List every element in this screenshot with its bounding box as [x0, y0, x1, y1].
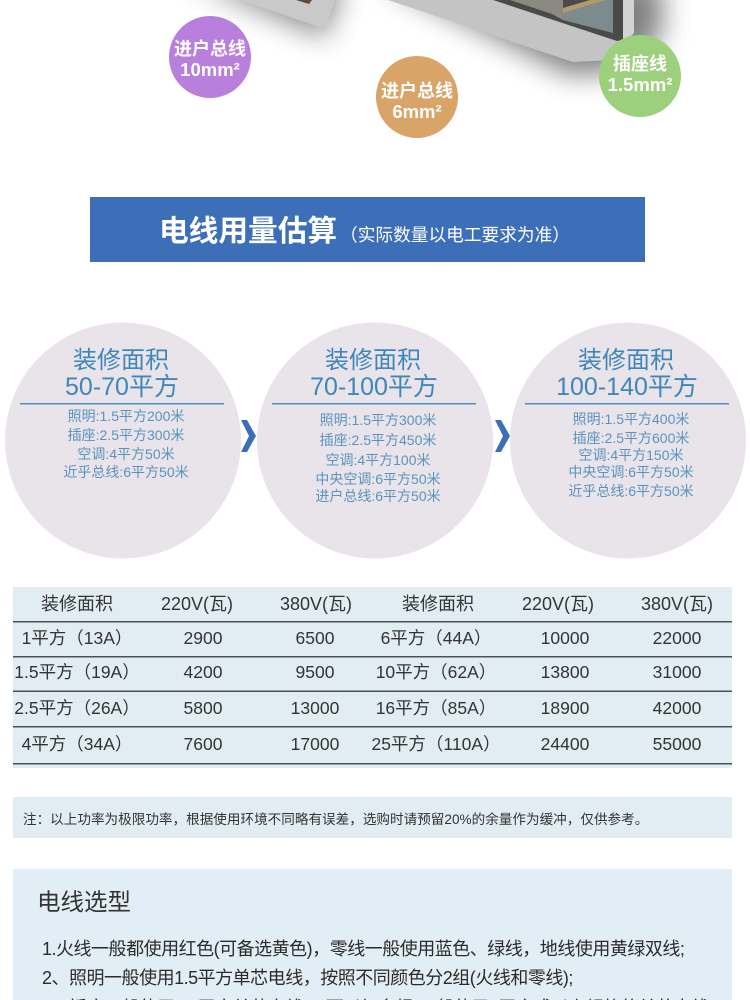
table row 3: 13000 — [291, 698, 340, 718]
note bar — [13, 797, 732, 838]
circle: 70-100 sqm: 进户总线:6平方50米 — [315, 488, 441, 504]
panel heading: 电线选型 — [37, 889, 131, 915]
selection notes — [42, 939, 709, 1000]
circle: 70-100 sqm — [257, 322, 493, 558]
circle: 70-100 sqm: 中央空调:6平方50米 — [315, 471, 441, 487]
arrow: chevron 2 — [495, 420, 510, 452]
table row 3: 18900 — [541, 698, 590, 718]
selection notes: 2、照明一般使用1.5平方单芯电线，按照不同颜色分2组(火线和零线); — [42, 968, 573, 988]
table row 1 — [22, 628, 702, 648]
circle: 50-70 sqm: 空调:4平方50米 — [77, 446, 175, 462]
circle: 100-140 sqm: 100-140平方 — [556, 373, 698, 401]
photo: electrical boxes with shadow — [190, 0, 662, 76]
circle: 50-70 sqm: 照明:1.5平方200米 — [68, 408, 184, 424]
circle: 100-140 sqm: 装修面积 — [578, 347, 674, 374]
table row 2: 4200 — [184, 662, 223, 682]
table: wire power ratings — [13, 587, 732, 768]
table row 3: 5800 — [184, 698, 223, 718]
table row 2 — [14, 662, 702, 682]
table row 1: 22000 — [653, 628, 702, 648]
table row 2: 1.5平方（19A） — [14, 662, 140, 682]
table row 2: 10平方（62A） — [376, 662, 496, 682]
panel: wire selection — [13, 869, 732, 1000]
badge: socket line 1.5mm² — [599, 35, 681, 117]
table row 1: 6500 — [296, 628, 335, 648]
table header row: 380V(瓦) — [641, 594, 713, 614]
table row 1: 2900 — [184, 628, 223, 648]
circle: 70-100 sqm: 插座:2.5平方450米 — [320, 432, 436, 448]
table row 1: 6平方（44A） — [381, 628, 491, 648]
circle: 100-140 sqm: 空调:4平方150米 — [578, 447, 684, 463]
circle: 70-100 sqm: 空调:4平方100米 — [325, 452, 431, 468]
circle: 100-140 sqm: 插座:2.5平方600米 — [573, 430, 689, 446]
badge: incoming line 10mm²: 10mm² — [180, 59, 240, 80]
circle: 100-140 sqm: 中央空调:6平方50米 — [568, 464, 694, 480]
badge: socket line 1.5mm²: 1.5mm² — [608, 74, 672, 95]
table row 4: 25平方（110A） — [371, 734, 501, 754]
table row 2: 9500 — [296, 662, 335, 682]
table row 3: 2.5平方（26A） — [14, 698, 140, 718]
badge: incoming line 10mm²: 进户总线 — [174, 38, 246, 59]
circle: 100-140 sqm: 照明:1.5平方400米 — [573, 411, 689, 427]
badge: incoming line 6mm² — [376, 56, 458, 138]
table row 4: 55000 — [653, 734, 702, 754]
badge: incoming line 10mm² — [169, 16, 251, 98]
table header row: 装修面积 — [41, 594, 113, 614]
table row 1: 1平方（13A） — [22, 628, 132, 648]
table row 3: 42000 — [653, 698, 702, 718]
badge: incoming line 6mm²: 6mm² — [392, 101, 442, 122]
table row 4: 17000 — [291, 734, 340, 754]
table header row: 220V(瓦) — [161, 594, 233, 614]
table header row — [41, 594, 713, 614]
table header row: 220V(瓦) — [522, 594, 594, 614]
table row 4: 24400 — [541, 734, 590, 754]
circle: 70-100 sqm: 照明:1.5平方300米 — [320, 412, 436, 428]
table row 4: 4平方（34A） — [22, 734, 132, 754]
circle: 50-70 sqm: 50-70平方 — [65, 373, 179, 401]
selection notes: 1.火线一般都使用红色(可备选黄色)，零线一般使用蓝色、绿线，地线使用黄绿双线; — [42, 939, 684, 959]
table row 4 — [22, 734, 702, 754]
circle: 50-70 sqm: 插座:2.5平方300米 — [68, 427, 184, 443]
table row 4: 7600 — [184, 734, 223, 754]
heading banner: （实际数量以电工要求为准） — [340, 225, 570, 245]
note bar: 注：以上功率为极限功率，根据使用环境不同略有误差，选购时请预留20%的余量作为缓冲，仅供参考。 — [23, 811, 648, 827]
table row 1: 10000 — [541, 628, 590, 648]
table row 2: 31000 — [653, 662, 702, 682]
circle: 50-70 sqm: 装修面积 — [73, 347, 169, 374]
heading banner: 电线用量估算 — [159, 215, 337, 248]
badge: incoming line 6mm²: 进户总线 — [381, 80, 453, 101]
circle: 100-140 sqm: 近乎总线:6平方50米 — [568, 483, 694, 499]
badge: socket line 1.5mm²: 插座线 — [613, 53, 667, 74]
circle: 100-140 sqm — [510, 322, 746, 558]
table header row: 380V(瓦) — [280, 594, 352, 614]
circle: 50-70 sqm — [5, 322, 241, 558]
circle: 50-70 sqm: 近乎总线:6平方50米 — [63, 464, 189, 480]
arrow: chevron 1 — [241, 420, 256, 452]
circle: 70-100 sqm: 70-100平方 — [310, 373, 438, 401]
heading banner — [90, 197, 645, 262]
table row 3 — [14, 698, 702, 718]
table row 3: 16平方（85A） — [376, 698, 496, 718]
circle: 70-100 sqm: 装修面积 — [325, 347, 421, 374]
table row 2: 13800 — [541, 662, 590, 682]
table header row: 装修面积 — [402, 594, 474, 614]
